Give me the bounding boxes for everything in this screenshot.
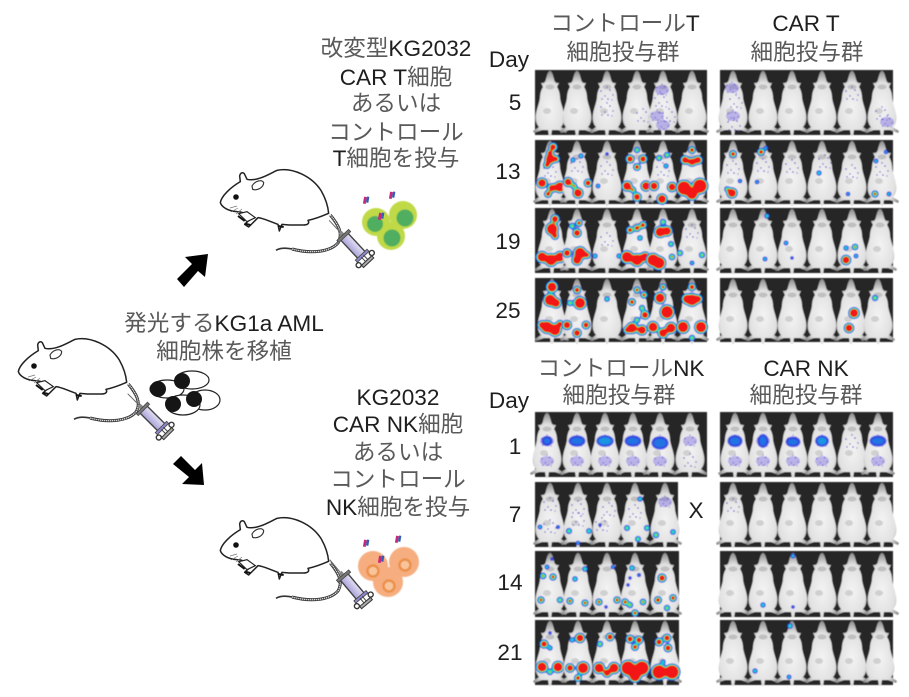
day labels, lower: 7 bbox=[509, 502, 521, 527]
day labels, lower: 1 bbox=[509, 434, 521, 459]
text: KG2032 CAR NK dosing: CAR NK細胞 bbox=[333, 412, 463, 437]
text: modified KG2032 CAR T dosing: CAR T細胞 bbox=[340, 65, 452, 90]
heading: CAR T group: 細胞投与群 bbox=[751, 40, 863, 65]
arrow: down-right bbox=[173, 456, 204, 485]
day labels, upper: 5 bbox=[509, 90, 521, 115]
panel: control NK day 21 bbox=[533, 620, 682, 686]
day labels, lower: 14 bbox=[497, 570, 523, 595]
day labels, upper: 13 bbox=[495, 159, 521, 184]
panel: control NK day 7 bbox=[533, 482, 682, 548]
heading: CAR T group: CAR T bbox=[772, 11, 840, 36]
panel: control T day 25 bbox=[535, 278, 709, 344]
heading: control NK group bbox=[538, 356, 704, 408]
panel: control T day 5 bbox=[533, 70, 709, 136]
text: modified KG2032 CAR T dosing: 改変型KG2032 bbox=[321, 36, 471, 61]
heading: CAR T group bbox=[751, 11, 863, 65]
label: Day, lower: Day bbox=[489, 388, 530, 413]
text: KG2032 CAR NK dosing: コントロール bbox=[330, 467, 466, 492]
panel: control NK day 14 bbox=[533, 551, 682, 618]
panel: CAR T day 19 bbox=[716, 208, 897, 274]
panel: CAR NK day 1 bbox=[718, 412, 895, 478]
heading: control T group bbox=[550, 11, 700, 65]
panel: control NK day 1 bbox=[530, 412, 707, 478]
text: KG2032 CAR NK dosing: NK細胞を投与 bbox=[326, 495, 470, 520]
text: KG2032 CAR NK dosing bbox=[326, 385, 470, 520]
text: modified KG2032 CAR T dosing: あるいは bbox=[351, 91, 441, 116]
label: Day, upper: Day bbox=[489, 47, 530, 72]
heading: CAR NK group bbox=[750, 356, 862, 408]
text: transplant luminescent KG1a AML bbox=[124, 311, 324, 364]
text: KG2032 CAR NK dosing: KG2032 bbox=[357, 385, 439, 410]
day labels, lower bbox=[497, 434, 523, 665]
heading: control T group: コントロールT bbox=[550, 11, 700, 36]
heading: CAR NK group: CAR NK bbox=[763, 356, 849, 381]
heading: CAR NK group: 細胞投与群 bbox=[750, 383, 862, 408]
text: transplant luminescent KG1a AML: 発光するKG1a AML bbox=[124, 311, 324, 336]
text: modified KG2032 CAR T dosing bbox=[321, 36, 471, 171]
panel: CAR NK day 7 bbox=[716, 482, 899, 548]
day labels, upper: 19 bbox=[495, 229, 521, 254]
panel: CAR NK day 21 bbox=[716, 620, 897, 686]
arrow: up-right bbox=[177, 254, 208, 287]
text: KG2032 CAR NK dosing: あるいは bbox=[353, 440, 443, 465]
text: modified KG2032 CAR T dosing: コントロール bbox=[328, 120, 464, 145]
mark: X, deceased mouse: X bbox=[688, 498, 704, 523]
illustration: mouse injected with CAR T cells bbox=[220, 170, 417, 271]
heading: control NK group: 細胞投与群 bbox=[563, 383, 675, 408]
text: modified KG2032 CAR T dosing: T細胞を投与 bbox=[333, 146, 459, 171]
panel: control T day 19 bbox=[535, 208, 709, 274]
heading: control T group: 細胞投与群 bbox=[567, 40, 679, 65]
panel: CAR T day 13 bbox=[716, 140, 899, 206]
text: transplant luminescent KG1a AML: 細胞株を移植 bbox=[156, 339, 292, 364]
panel: control T day 13 bbox=[533, 140, 709, 206]
day labels, upper bbox=[495, 90, 521, 323]
panel: CAR T day 25 bbox=[716, 278, 895, 344]
day labels, upper: 25 bbox=[495, 298, 521, 323]
heading: control NK group: コントロールNK bbox=[538, 356, 704, 381]
panel: CAR T day 5 bbox=[716, 70, 899, 136]
illustration: mouse injected with CAR NK cells bbox=[220, 518, 419, 612]
illustration: mouse with tumour cell injection bbox=[18, 339, 220, 443]
day labels, lower: 21 bbox=[497, 640, 523, 665]
panel: CAR NK day 14 bbox=[716, 551, 899, 618]
